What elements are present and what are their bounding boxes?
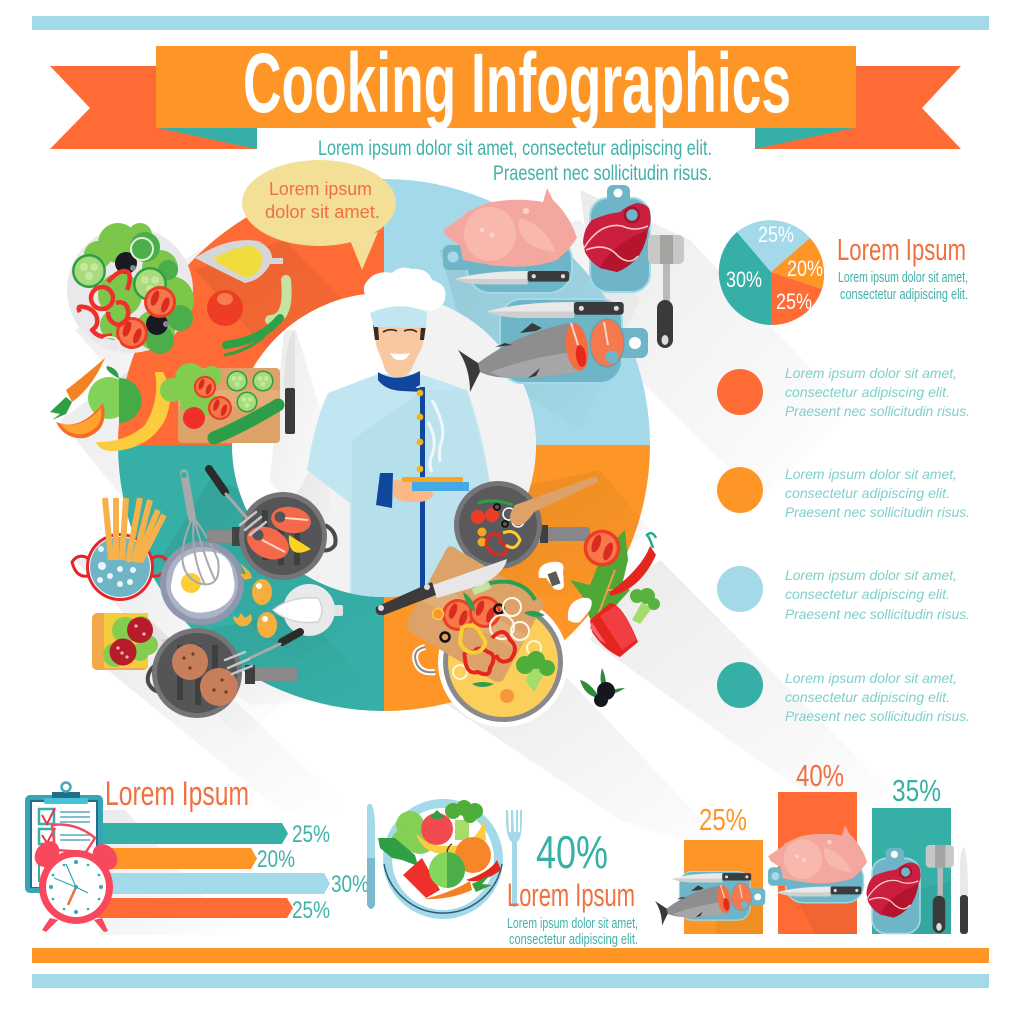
food: mushrooms (539, 562, 592, 623)
steam (428, 400, 443, 472)
chef smile (390, 353, 410, 360)
chef placket (420, 387, 425, 607)
legend item: teal: consectetur adipiscing elit. (785, 689, 950, 705)
pie slice: red 25% (771, 272, 822, 325)
legend item: orange: consectetur adipiscing elit. (785, 485, 950, 501)
circular ring chart (118, 179, 650, 711)
bar labels: 30% (331, 871, 369, 898)
pie chart (719, 220, 824, 325)
food: eggs and shells (233, 563, 277, 638)
column icon: steak (866, 848, 921, 934)
food: chili pepper (610, 533, 656, 596)
pie labels: 25% (776, 289, 812, 314)
icon: burger fork (225, 632, 300, 674)
column icon: knife (960, 847, 968, 934)
legend item: red: consectetur adipiscing elit. (785, 384, 950, 400)
ring: orange quadrant (384, 445, 650, 711)
food: fish on board with knife (458, 299, 648, 392)
column: orange 25% (684, 840, 763, 934)
food: burger patties pan (148, 628, 297, 718)
plate: lettuce (391, 811, 436, 854)
chef cuff (376, 473, 393, 508)
chef (307, 268, 490, 610)
food: steak on board (583, 185, 651, 292)
chef eyes (383, 330, 417, 332)
plate: carrot (424, 875, 492, 899)
pie labels: 30% (726, 267, 762, 292)
subtitle (318, 137, 712, 185)
inner white disc with long shadows (232, 294, 536, 594)
serving plate (402, 477, 469, 491)
food: cutting board with vegetables (160, 363, 280, 443)
left ribbon tail (50, 66, 257, 149)
food: oil gravy boat (195, 240, 283, 283)
food: broccoli (630, 588, 660, 624)
column icon: mallet (926, 845, 954, 933)
pie slice: orange 20% (771, 238, 824, 289)
top blue bar (32, 16, 989, 30)
food: sandwich toast (92, 613, 158, 670)
column: red 40% (778, 792, 857, 934)
legend item: blue: Praesent nec sollicitudin risus. (785, 606, 970, 622)
column icon: fish (655, 871, 765, 925)
food: cutting board with sliced vegetables (406, 546, 545, 682)
subtitle: Lorem ipsum dolor sit amet, consectetur adipiscing elit. (318, 137, 712, 160)
percentage 40%: 40% (536, 826, 608, 878)
pie caption: Lorem ipsum dolor sit amet, (838, 269, 968, 286)
food: fried egg pan (160, 541, 244, 625)
legend item: red: Praesent nec sollicitudin risus. (785, 403, 970, 419)
plate: chili (466, 860, 501, 881)
ring: red quadrant (118, 179, 384, 445)
chef buttons (417, 390, 423, 472)
food: orange slice (56, 403, 105, 438)
horizontal arrow bars (90, 823, 330, 918)
bar labels: 20% (257, 846, 295, 873)
food: salmon pan (207, 492, 336, 580)
title banner (50, 36, 961, 149)
label 35%: 35% (892, 773, 941, 808)
bottom blue bar (32, 974, 989, 988)
pie caption: consectetur adipiscing elit. (840, 286, 968, 303)
plate: apple (429, 844, 465, 888)
food: salad plate (67, 223, 194, 357)
bottom orange bar (32, 948, 989, 963)
bar labels (257, 821, 369, 924)
food: milk jug (273, 584, 343, 636)
food: pasta in colander (72, 498, 168, 601)
icon: table knife (367, 804, 375, 909)
plate: tomato (421, 810, 453, 845)
column: teal 35% (872, 808, 951, 934)
banner body (156, 46, 856, 128)
food: chicken on board with knife (443, 188, 577, 293)
right ribbon fold (755, 128, 854, 149)
chef coat (307, 374, 490, 610)
food: olive with leaves (580, 668, 625, 707)
icon: chef knife (376, 559, 507, 615)
icon: vertical knife (284, 332, 295, 434)
icon: alarm clock (30, 825, 122, 932)
bar heading: Lorem Ipsum (105, 775, 249, 813)
broccoli in pot (516, 651, 555, 692)
legend item: teal: Lorem ipsum dolor sit amet, (785, 670, 957, 686)
food: apple (88, 366, 142, 423)
legend item: orange (717, 466, 970, 520)
plate caption: consectetur adipiscing elit. (509, 931, 638, 948)
pie heading: Lorem Ipsum (837, 232, 966, 267)
column icon: chicken (768, 825, 867, 903)
legend item: blue (717, 566, 970, 622)
plate: parsley (378, 838, 418, 866)
ring: teal quadrant (118, 445, 384, 711)
right ribbon tail (755, 66, 961, 149)
column shading (715, 880, 951, 934)
food: spring onion (225, 280, 287, 355)
legend item: teal: Praesent nec sollicitudin risus. (785, 708, 970, 724)
legend item: blue: consectetur adipiscing elit. (785, 586, 950, 602)
icon: grill fork (209, 469, 266, 535)
subtitle: Praesent nec sollicitudin risus. (493, 162, 712, 185)
legend item: red: Lorem ipsum dolor sit amet, (785, 365, 957, 381)
chef neck and face (375, 325, 425, 380)
food: red bell pepper (590, 603, 638, 657)
chef hair (373, 325, 426, 340)
icon: wooden spoon (510, 476, 598, 525)
legend item: teal (717, 662, 970, 724)
column chart (655, 758, 968, 934)
icon: table fork (506, 810, 522, 907)
pie labels: 25% (758, 222, 794, 247)
plate: broccoli (445, 800, 483, 840)
food: tomato with parsley (570, 530, 630, 622)
speech bubble (242, 160, 396, 270)
bar labels: 25% (292, 821, 330, 848)
bar infographic shadows (100, 810, 240, 935)
icon: clipboard (25, 782, 103, 893)
chef hat (364, 268, 446, 328)
icon: whisk (181, 472, 219, 585)
bar labels: 25% (292, 897, 330, 924)
pie slice: blue 25% (737, 220, 810, 272)
food: whole tomato (207, 290, 243, 326)
bubble text: dolor sit amet. (265, 202, 380, 222)
shadows outside ring (60, 190, 920, 860)
food: carrot and parsley top (50, 358, 105, 420)
food: large pot (415, 597, 589, 727)
icon: meat mallet (648, 235, 684, 348)
pie labels: 20% (787, 256, 823, 281)
food: banana (96, 372, 170, 451)
legend item: red (717, 365, 970, 419)
chef collar (378, 371, 423, 392)
legend item: orange: Praesent nec sollicitudin risus. (785, 504, 970, 520)
label 40%: 40% (796, 758, 844, 793)
legend item: orange: Lorem ipsum dolor sit amet, (785, 466, 957, 482)
pie slice: teal 30% (719, 232, 771, 325)
plate: pepper (403, 858, 440, 898)
bubble text: Lorem ipsum (269, 179, 372, 199)
label 25%: 25% (699, 802, 747, 837)
plate: orange (455, 837, 491, 873)
shadows across ring (160, 220, 650, 705)
food: vegetable pan with wooden spoon (454, 481, 590, 569)
plate: banana (416, 818, 486, 855)
plate caption (507, 915, 638, 948)
left ribbon fold (158, 128, 257, 149)
pie caption (838, 269, 968, 303)
plate caption: Lorem ipsum dolor sit amet, (507, 915, 638, 932)
food plate (378, 799, 503, 919)
chef hand (393, 480, 434, 502)
legend item: blue: Lorem ipsum dolor sit amet, (785, 567, 957, 583)
plate heading: Lorem Ipsum (507, 877, 635, 913)
bubble text (265, 179, 380, 222)
pie labels (726, 222, 823, 314)
ring: blue quadrant (384, 179, 650, 445)
